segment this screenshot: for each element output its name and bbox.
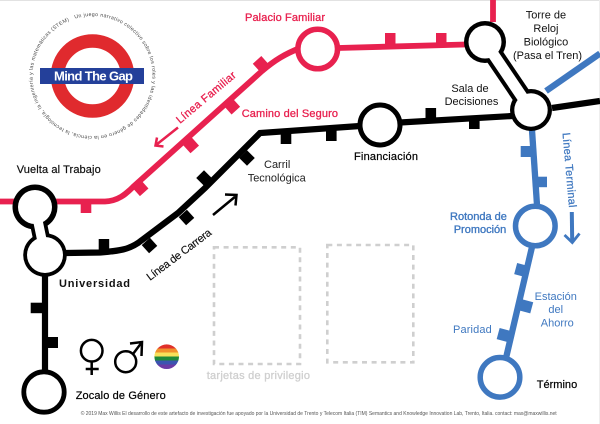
station: Vuelta al Trabajo and Universidad interchange <box>12 184 67 277</box>
label: Rotonda de Promoción: Promoción <box>454 224 506 236</box>
arrow: blue terminal direction <box>564 212 580 242</box>
station: Rotonda de Promoción <box>516 206 555 246</box>
footer credits: © 2019 Max Willis El desarrollo de este artefacto de investigación fue apoyado por la Universidad de Trento y Telecom Italia (TIM) Semantics and Knowledge Innovation Lab, Trento, Italia. contact: max@maxwillis.net <box>81 410 557 417</box>
black line: Línea de Carrera <box>31 101 600 372</box>
station: Zocalo de Género <box>24 372 64 412</box>
arrow: black carrera direction <box>213 194 236 215</box>
label: Universidad: Universidad <box>59 278 130 290</box>
circular description text: Un juego narrativo colectivo sobre los roles y las identidades de género en la ciencia, la tecnología, la ingeniería y las matemáticas (STEM) <box>28 12 156 140</box>
label: Torre de Reloj Biológico: (Pasa el Tren) <box>513 50 582 62</box>
heading: Palacio Familiar: Palacio Familiar <box>245 12 325 24</box>
blue bar <box>40 68 144 84</box>
red line: Línea Familiar <box>0 0 493 213</box>
red stops ticks <box>81 33 446 213</box>
label: Línea Terminal: Línea Terminal <box>560 132 578 208</box>
blue stops ticks <box>497 146 547 342</box>
station: Financiación <box>360 105 400 145</box>
black stops ticks <box>31 108 480 348</box>
red ring <box>58 41 128 111</box>
blue line: Línea Terminal <box>497 54 600 358</box>
label: Carril Tecnológica: Carril <box>264 159 290 171</box>
station: Torre de Reloj and Sala de Decisiones interchange <box>464 21 552 131</box>
icon: female symbol <box>81 340 102 375</box>
label: Estación del Ahorro: Ahorro <box>541 318 574 330</box>
logo: Mind The Gap roundel <box>28 12 156 140</box>
label: Torre de Reloj Biológico: Torre de <box>526 9 566 21</box>
arrow: red Línea Familiar direction <box>156 128 178 146</box>
label: Rotonda de Promoción: Rotonda de <box>450 211 507 223</box>
station: Palacio Familiar <box>298 29 338 69</box>
label: Vuelta al Trabajo: Vuelta al Trabajo <box>17 164 101 176</box>
station: Término <box>480 358 520 397</box>
label: Línea de Carrera: Línea de Carrera <box>145 226 215 283</box>
label: Torre de Reloj Biológico: Reloj <box>533 23 559 35</box>
privilege card placeholder 2 <box>327 245 413 362</box>
icon: rainbow flag circle <box>154 344 180 370</box>
icon: male symbol <box>115 342 142 372</box>
label: Estación del Ahorro: del <box>548 304 563 316</box>
label: Paridad: Paridad <box>453 324 492 336</box>
label: Zocalo de Género: Zocalo de Género <box>76 390 166 402</box>
label: Estación del Ahorro: Estación <box>535 291 577 303</box>
label: tarjetas de privilegio: tarjetas de privilegio <box>207 370 310 382</box>
privilege card placeholder 1 <box>214 247 300 364</box>
label: Línea Familiar: Línea Familiar <box>174 69 239 126</box>
label: Término: Término <box>537 379 577 391</box>
label: Torre de Reloj Biológico: Biológico <box>524 37 568 49</box>
label: Sala de Decisiones: Sala de <box>451 83 489 95</box>
label: Financiación: Financiación <box>354 151 418 163</box>
logo title: Mind The Gap <box>54 68 133 84</box>
label: Carril Tecnológica: Tecnológica <box>248 173 307 185</box>
label: Camino del Seguro: Camino del Seguro <box>242 108 338 120</box>
label: Sala de Decisiones: Decisiones <box>445 96 499 108</box>
